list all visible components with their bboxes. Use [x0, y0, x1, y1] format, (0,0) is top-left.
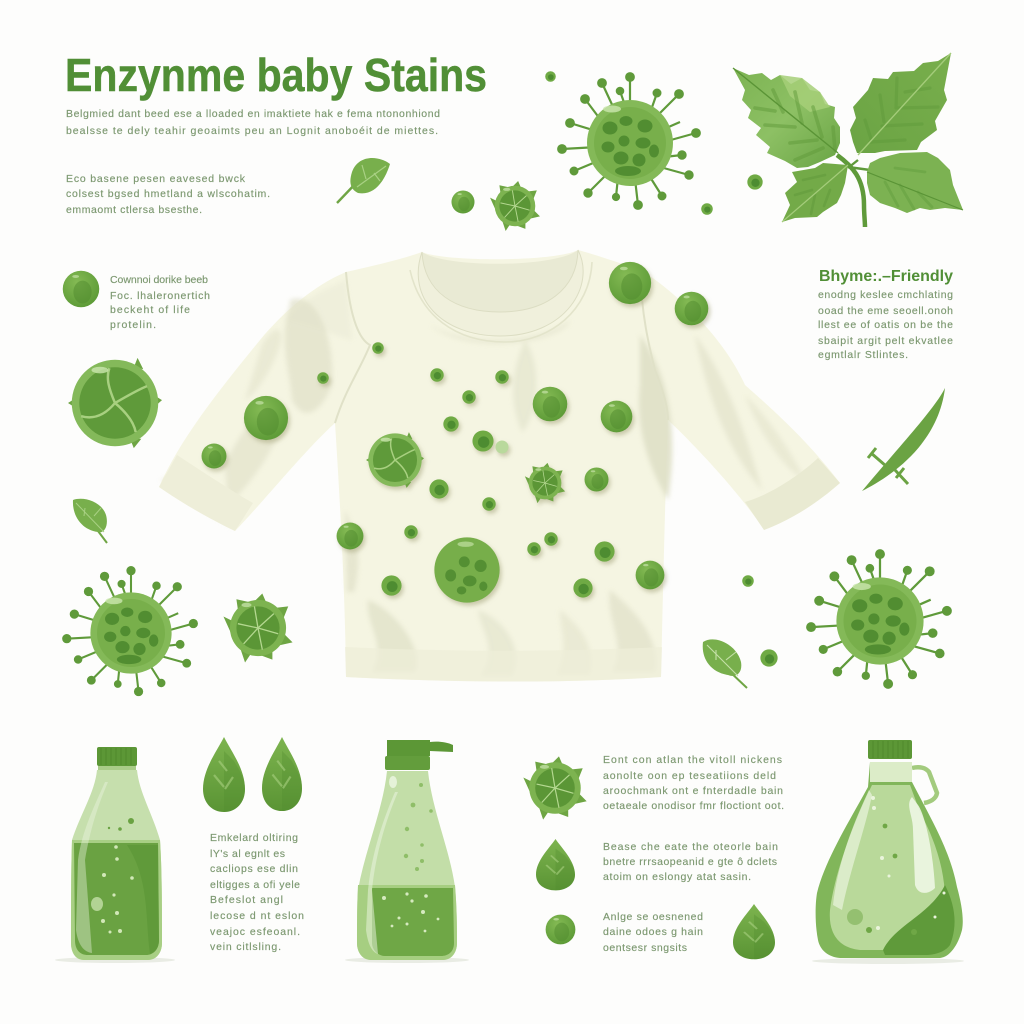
notes text 1: [603, 754, 784, 812]
text block under drops: lecose d nt eslon: [210, 910, 304, 922]
secondary text block: emmaomt ctlersa bsesthe.: [66, 204, 202, 216]
icon: large cell left: [68, 358, 162, 448]
icon: small leaf right: [703, 639, 747, 688]
text block under drops: cacliops ese dlin: [210, 863, 298, 875]
collar seam: [410, 262, 592, 342]
left note text: protelin.: [110, 319, 156, 331]
right note text: [818, 289, 953, 361]
notes text 3: [603, 911, 703, 954]
text block under drops: veajoc esfeoanl.: [210, 926, 300, 938]
text block under drops: [210, 832, 304, 953]
secondary text block: Eco basene pesen eavesed bwck: [66, 173, 246, 185]
text block under drops: lY's al egnlt es: [210, 848, 285, 860]
icon: large leaf cluster: [733, 53, 963, 227]
notes text 3: Anlge se oesnened: [603, 911, 703, 923]
left note text: [110, 274, 210, 331]
text block under drops: vein citlsling.: [210, 941, 281, 953]
text block under drops: Emkelard oltiring: [210, 832, 298, 844]
icon: dot beside leaves: [747, 174, 763, 190]
icon: spiked cell lower left: [223, 593, 293, 663]
notes text 1: aroochmank ont e fnterdadle bain: [603, 785, 783, 797]
notes text 2: Bease che eate the oteorle bain: [603, 841, 778, 853]
notes text 3: daine odoes g hain: [603, 926, 703, 938]
icon: green ball left note: [63, 271, 99, 307]
panel: left note: [63, 271, 210, 331]
icon: pea pod: [862, 388, 945, 491]
drop left: [203, 737, 245, 812]
right cuff: [745, 458, 840, 530]
neck opening: [422, 250, 578, 312]
icon: green ball: [451, 190, 475, 214]
left note text: Cownnoi dorike beeb: [110, 274, 208, 286]
icon: small drop: [536, 839, 575, 890]
drop right: [262, 737, 302, 811]
icon: small ball: [546, 915, 575, 944]
t-shirt: [159, 250, 840, 682]
shirt folds: [160, 280, 805, 676]
icon: small leaf top: [337, 158, 390, 203]
icon: virus lower left: [63, 567, 197, 695]
icon: virus top: [558, 73, 700, 209]
stains on shirt: [202, 262, 708, 603]
right note text: llest ee of oatis on be the: [818, 319, 953, 331]
notes text 2: atoim on eslongy atat sasin.: [603, 871, 751, 883]
icon: small leaf left: [73, 499, 107, 543]
secondary text block: [66, 173, 270, 216]
right note text: enodng keslee cmchlating: [818, 289, 953, 301]
intro text block: Belgmied dant beed ese a lloaded en imaktiete hak e fema ntononhiond: [66, 108, 440, 120]
notes text 1: aonolte oon ep teseatiions deld: [603, 770, 776, 782]
notes text 3: oentsesr sngsits: [603, 942, 687, 954]
right note text: ooad the eme seoell.onoh: [818, 305, 953, 317]
panel: right note: [818, 268, 953, 361]
notes text 2: bnetre rrrsaopeanid e gte ô dclets: [603, 856, 777, 868]
right note heading: Bhyme:.–Friendly: [819, 268, 953, 285]
intro text block: [66, 108, 440, 137]
left cuff: [159, 455, 253, 531]
icon: floating dot top: [545, 71, 556, 82]
notes text 1: Eont con atlan the vitoll nickens: [603, 754, 782, 766]
collar rib: [418, 250, 583, 336]
bottle 2 pump: [345, 740, 469, 963]
text block under drops: eltigges a ofi yele: [210, 879, 300, 891]
left note text: Foc. lhaleronertich: [110, 290, 210, 302]
jug bottle: [812, 740, 964, 964]
bottle 1: [55, 747, 175, 963]
shoulder seams: [335, 270, 668, 423]
text block under drops: Befeslot angl: [210, 894, 283, 906]
panel: bottom right notes: [523, 754, 784, 959]
intro text block: bealsse te dely teahir geoaimts peu an Lognit anoboéit de miettes.: [66, 125, 438, 137]
right note text: sbaipit argit pelt ekvatlee: [818, 335, 953, 347]
notes text 1: oetaeale onodisor fmr floctiont oot.: [603, 800, 784, 812]
icon: spiked cell bottom: [523, 756, 587, 820]
secondary text block: colsest bgsed hmetland a wlscohatim.: [66, 188, 270, 200]
icon: dot right of shirt: [742, 575, 754, 587]
left note text: beckeht of life: [110, 304, 190, 316]
shirt body: [159, 250, 840, 682]
icon: drop bottom: [733, 904, 775, 959]
icon: spiked cell top: [490, 181, 540, 231]
icon: dot right of virus: [701, 203, 713, 215]
icon: virus right: [807, 550, 951, 688]
title: Enzynme baby Stains: [65, 49, 487, 101]
icon: dot beside small leaf: [760, 649, 778, 667]
shirt hem: [345, 647, 662, 682]
right note text: egmtlalr Stlintes.: [818, 349, 908, 361]
notes text 2: [603, 841, 778, 883]
